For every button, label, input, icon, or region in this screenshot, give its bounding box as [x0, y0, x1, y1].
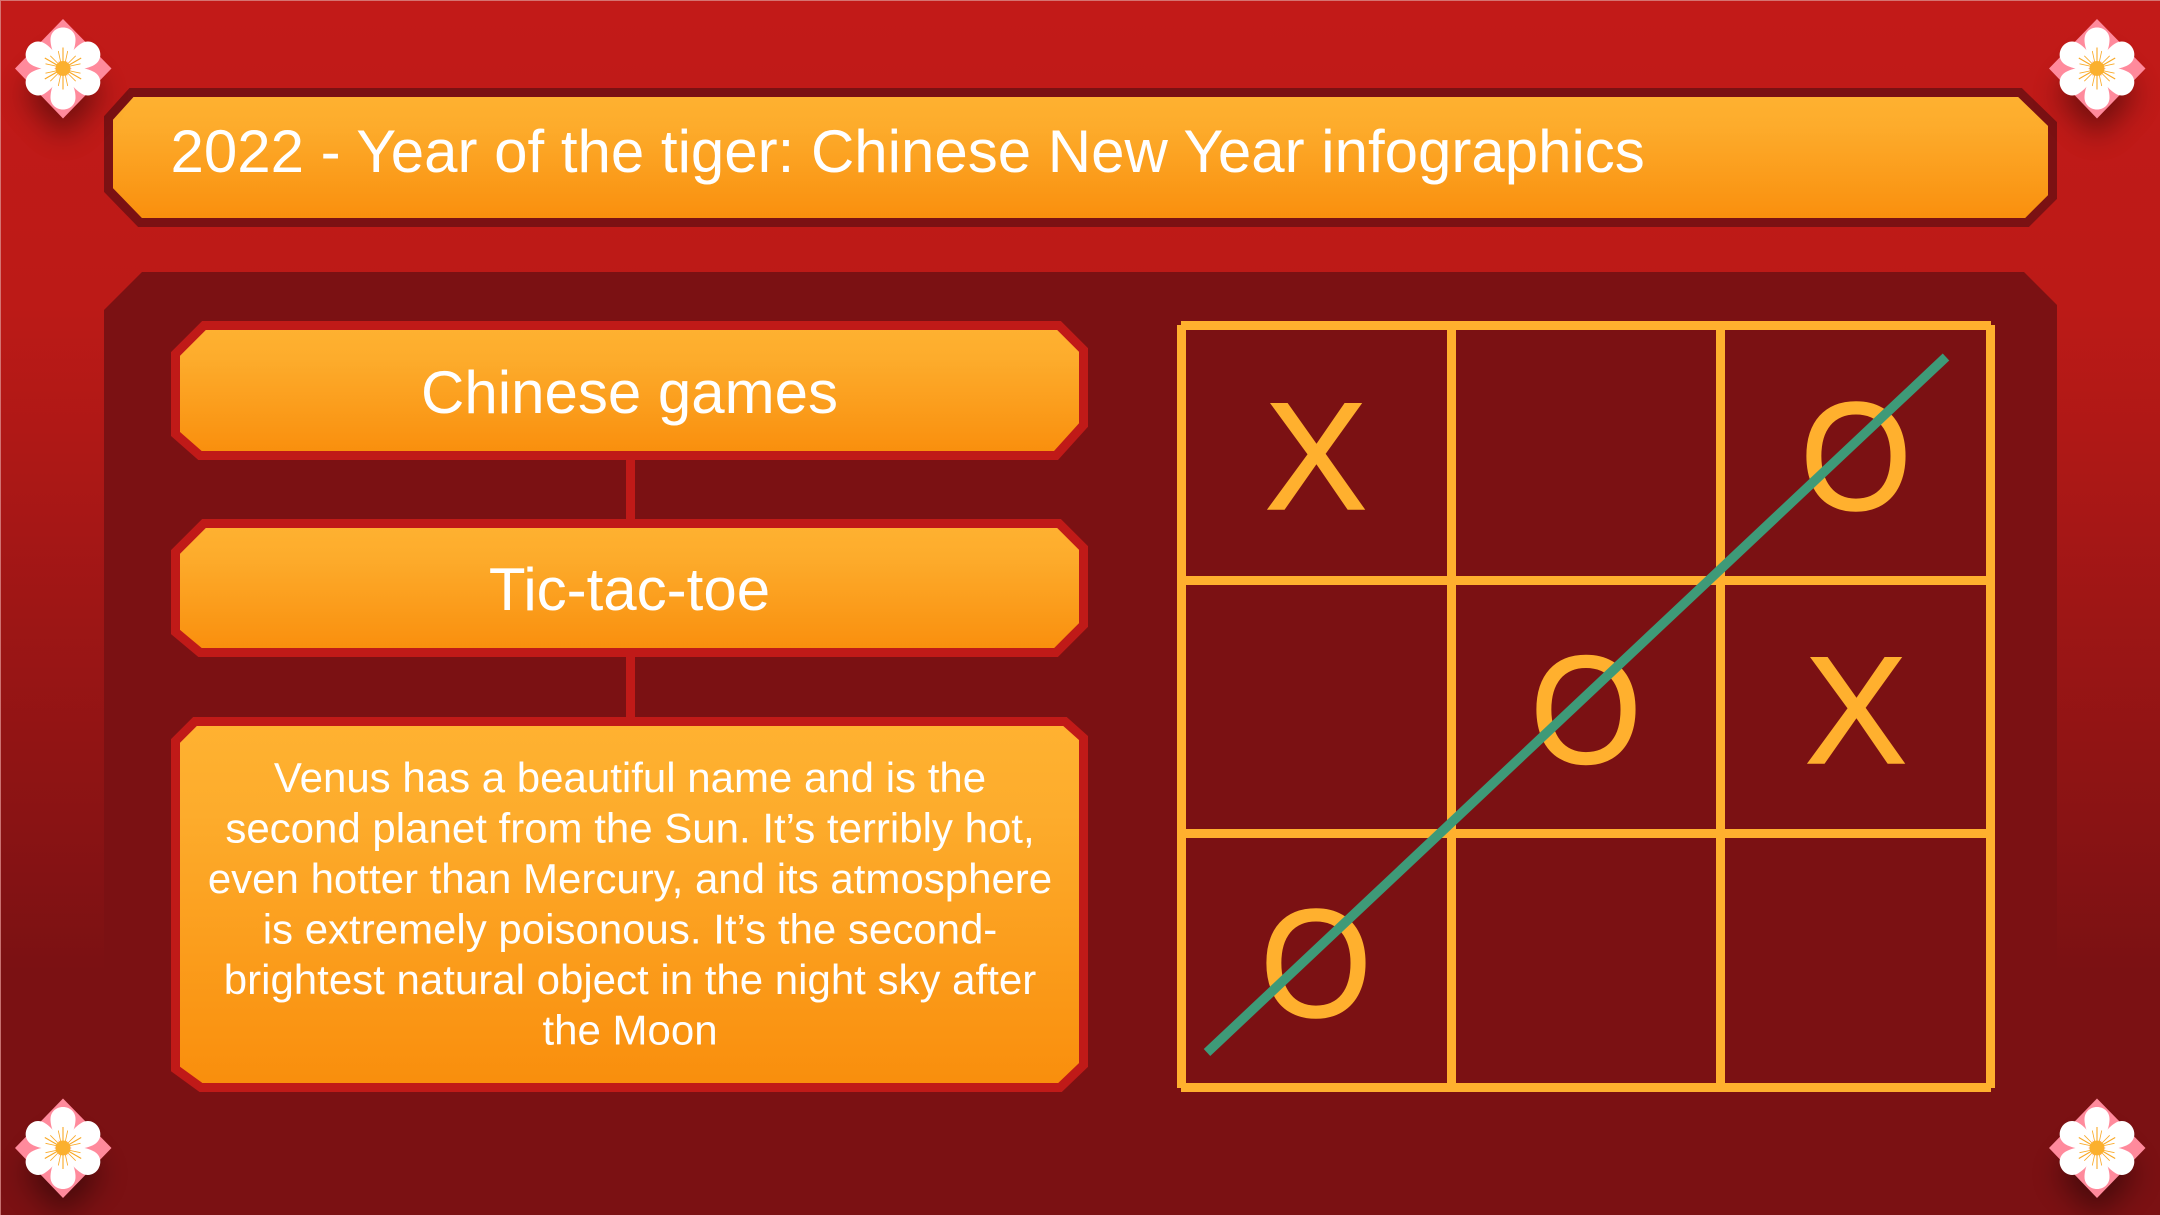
board marks	[1260, 370, 1912, 1050]
main dark panel	[104, 272, 2057, 1215]
box: Tic-tac-toe	[176, 524, 1084, 652]
description text	[208, 754, 1052, 1054]
board marks: O	[1260, 877, 1372, 1050]
description text: Venus has a beautiful name and is the	[274, 754, 986, 801]
board marks: X	[1805, 625, 1907, 796]
box text: Chinese games	[421, 359, 838, 426]
winning line	[1207, 357, 1946, 1052]
title text: 2022 - Year of the tiger: Chinese New Year infographics	[170, 118, 1645, 185]
tic-tac-toe board	[1181, 325, 1991, 1088]
title banner	[108, 92, 2052, 222]
description text: is extremely poisonous. It’s the second-	[263, 906, 997, 952]
description text: even hotter than Mercury, and its atmosphere	[208, 855, 1052, 902]
board marks: X	[1265, 371, 1367, 542]
connector: category to game	[626, 455, 635, 525]
icon: flower bottom right	[2049, 1098, 2146, 1215]
grid lines	[1181, 325, 1991, 1088]
board marks: O	[1530, 623, 1642, 796]
icon: flower top right	[2049, 19, 2146, 136]
box text: Tic-tac-toe	[489, 556, 770, 623]
description text: brightest natural object in the night sky after	[224, 956, 1036, 1003]
description text: the Moon	[542, 1006, 718, 1054]
icon: flower top left	[15, 19, 112, 136]
description text: second planet from the Sun. It’s terribly hot,	[225, 804, 1035, 852]
icon: flower bottom left	[15, 1098, 112, 1215]
board marks: O	[1800, 370, 1912, 543]
connector: game to description	[626, 652, 635, 722]
box: description	[176, 722, 1084, 1088]
box: Chinese games	[176, 326, 1084, 456]
